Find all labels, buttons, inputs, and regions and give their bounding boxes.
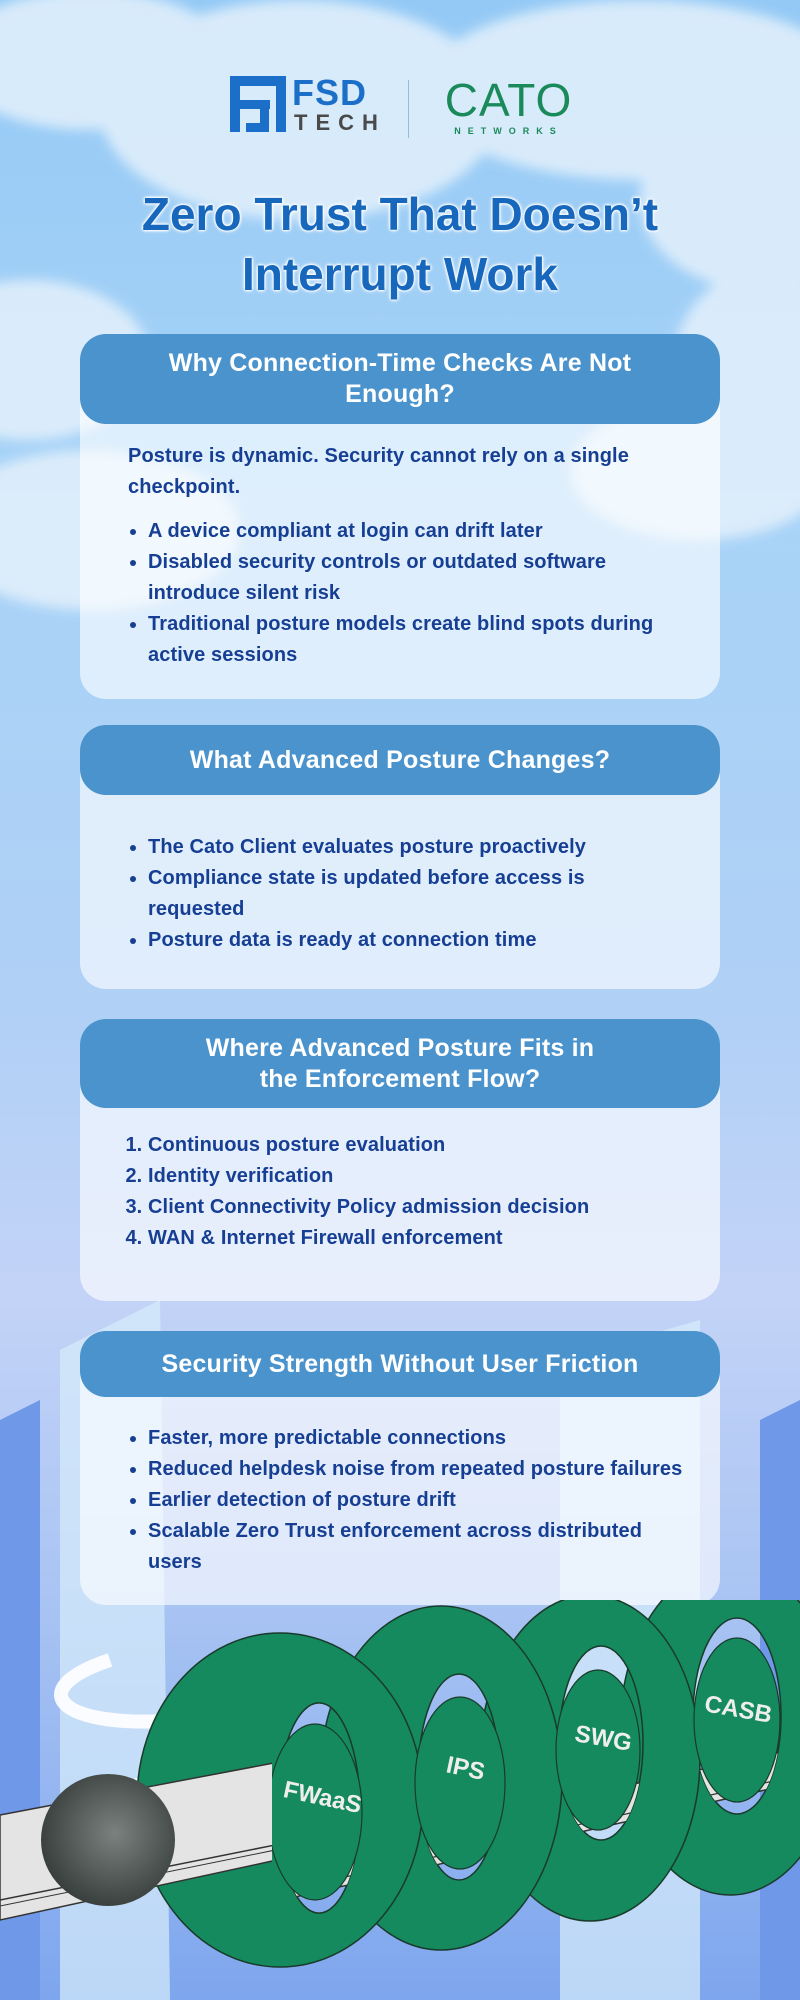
rail: far section through holes — [294, 1752, 778, 1897]
text block: Posture is dynamic. Security cannot rely on a single checkpoint. — [128, 445, 629, 498]
panel: why connection-time checks — [80, 334, 720, 699]
ring labels: FWaaS — [281, 1776, 364, 1819]
heading: Security Strength Without User Friction — [161, 1350, 639, 1378]
logo: CATO NETWORKS: CATO — [445, 74, 572, 126]
logo: CATO NETWORKS: NETWORKS — [454, 126, 563, 136]
heading — [80, 334, 720, 424]
ring labels: SWG — [573, 1720, 634, 1757]
ring labels: IPS — [444, 1751, 487, 1786]
heading: Where Advanced Posture Fits in — [206, 1034, 594, 1062]
bullet list: Scalable Zero Trust enforcement across distributed users — [148, 1520, 642, 1573]
heading: What Advanced Posture Changes? — [190, 746, 610, 774]
ring bodies — [137, 1565, 800, 1967]
logo: FSD TECH — [230, 72, 386, 135]
panel: security strength — [80, 1331, 720, 1605]
bullet list: A device compliant at login can drift later — [148, 520, 543, 542]
bullet list — [130, 520, 653, 666]
heading: Why Connection-Time Checks Are Not Enough? — [169, 349, 631, 408]
heading — [80, 725, 720, 795]
panel: what advanced posture changes — [80, 725, 720, 989]
bullet list: Compliance state is updated before access is requested — [148, 867, 585, 920]
panel: enforcement flow — [80, 1019, 720, 1301]
numbered list: Identity verification — [148, 1165, 333, 1187]
bullet list: Faster, more predictable connections — [148, 1427, 506, 1449]
numbered list — [126, 1134, 589, 1249]
bullet list — [130, 836, 586, 951]
title: Interrupt Work — [242, 248, 558, 300]
bullet list: The Cato Client evaluates posture proactively — [148, 836, 586, 858]
ring labels — [281, 1690, 774, 1819]
illustration: security rings with rail and ball — [0, 1600, 800, 1968]
bullet list: Posture data is ready at connection time — [148, 929, 537, 951]
heading: the Enforcement Flow? — [260, 1064, 540, 1092]
inner discs — [268, 1638, 780, 1900]
bullet list: Disabled security controls or outdated software introduce silent risk — [148, 551, 606, 604]
bullet list: Earlier detection of posture drift — [148, 1489, 456, 1511]
bullet list: Traditional posture models create blind spots during active sessions — [148, 613, 653, 666]
title: Zero Trust That Doesn’t — [142, 188, 658, 240]
logo: FSD TECH: FSD — [292, 72, 367, 113]
rail: near section — [0, 1762, 272, 1921]
numbered list: Continuous posture evaluation — [148, 1134, 445, 1156]
title — [140, 188, 660, 302]
numbered list: Client Connectivity Policy admission decision — [148, 1196, 589, 1218]
heading — [80, 1331, 720, 1397]
bullet list — [130, 1427, 682, 1573]
heading — [80, 1019, 720, 1108]
bullet list: Reduced helpdesk noise from repeated posture failures — [148, 1458, 682, 1480]
ring labels: CASB — [702, 1690, 774, 1729]
ball — [41, 1774, 175, 1906]
numbered list: WAN & Internet Firewall enforcement — [148, 1227, 503, 1249]
logo: FSD TECH: TECH — [294, 110, 386, 135]
